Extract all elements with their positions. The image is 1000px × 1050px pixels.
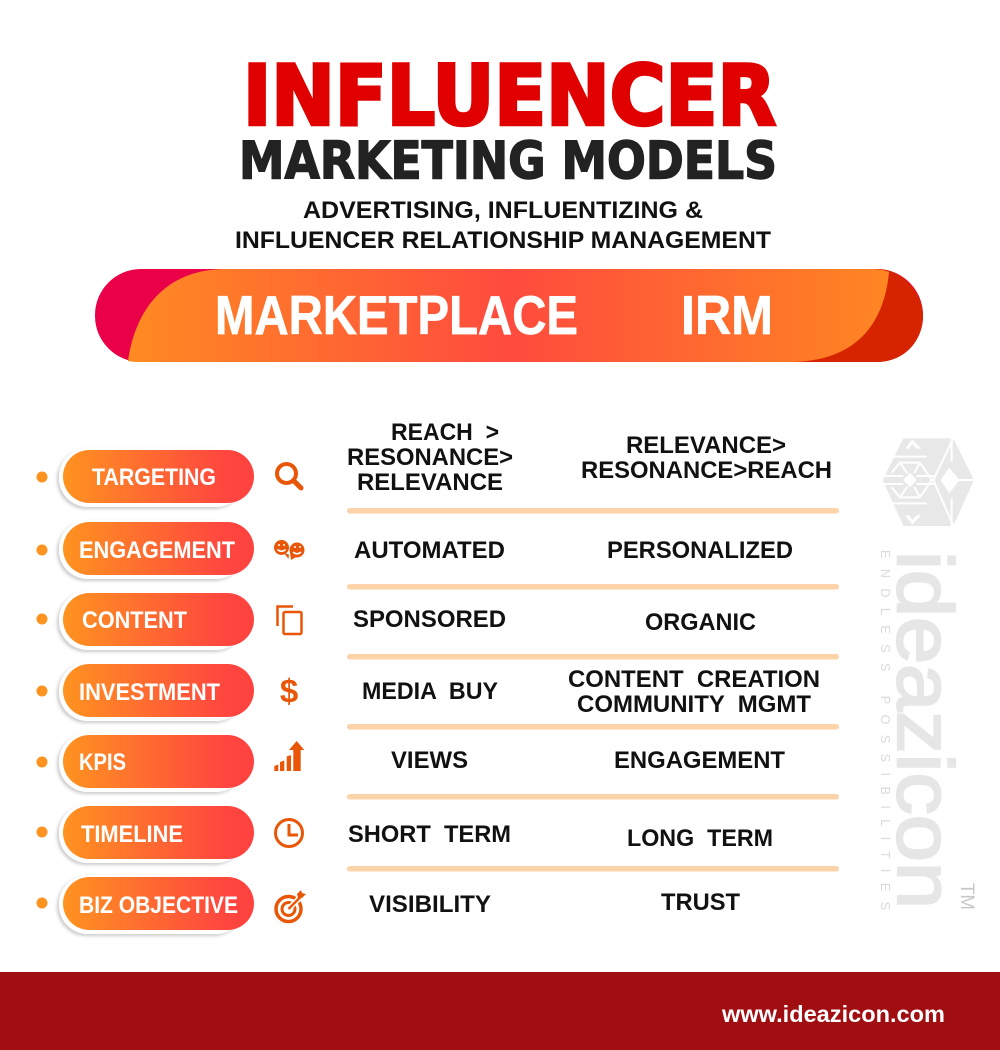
row: investment bbox=[36, 662, 820, 721]
comparison text: RELEVANCE> bbox=[626, 432, 786, 459]
comparison text: MEDIA BUY bbox=[362, 678, 498, 705]
title bbox=[239, 48, 777, 192]
comparison text: REACH > bbox=[391, 419, 499, 446]
icon: copy bbox=[278, 606, 302, 634]
pill label bbox=[59, 662, 254, 721]
row: targeting bbox=[36, 419, 832, 507]
comparison text: PERSONALIZED bbox=[607, 537, 793, 564]
pill label bbox=[59, 875, 254, 934]
pill label: TARGETING bbox=[92, 464, 216, 491]
title: INFLUENCER bbox=[243, 48, 776, 144]
comparison text bbox=[362, 666, 820, 718]
comparison text: LONG TERM bbox=[627, 825, 773, 852]
logo mark bbox=[883, 438, 974, 526]
pill label bbox=[59, 804, 254, 863]
pill label: CONTENT bbox=[82, 607, 187, 634]
trademark: TM bbox=[956, 883, 977, 910]
footer band bbox=[0, 972, 1000, 1050]
comparison text bbox=[369, 889, 740, 918]
row: timeline bbox=[36, 804, 773, 863]
header bar: marketplace vs IRM: IRM bbox=[681, 284, 773, 346]
comparison text bbox=[391, 747, 785, 774]
pill label bbox=[59, 591, 254, 650]
icon: clock bbox=[276, 820, 302, 846]
comparison text: RELEVANCE bbox=[357, 469, 503, 496]
comparison text bbox=[353, 606, 756, 636]
comparison text: CONTENT CREATION bbox=[568, 666, 820, 693]
icon: growth bars bbox=[274, 741, 304, 771]
pill label: BIZ OBJECTIVE bbox=[79, 892, 238, 919]
tagline: ENDLESS POSSIBILITIES bbox=[878, 550, 892, 910]
subtitle: ADVERTISING, INFLUENTIZING & bbox=[303, 197, 703, 224]
comparison text: ORGANIC bbox=[645, 609, 756, 636]
comparison text: VISIBILITY bbox=[369, 891, 491, 918]
bullet bbox=[36, 756, 48, 768]
watermark: ideazicon logo bbox=[878, 438, 977, 910]
row: content bbox=[36, 591, 756, 650]
bullet bbox=[36, 826, 48, 838]
subtitle: INFLUENCER RELATIONSHIP MANAGEMENT bbox=[235, 227, 771, 254]
bullet bbox=[36, 544, 48, 556]
comparison text: RESONANCE>REACH bbox=[581, 457, 832, 484]
comparison text: VIEWS bbox=[391, 747, 468, 774]
comparison text: SHORT TERM bbox=[348, 821, 511, 848]
bullet bbox=[36, 614, 48, 624]
pill label bbox=[59, 733, 254, 792]
comparison text: RESONANCE> bbox=[347, 444, 513, 471]
pill label bbox=[59, 520, 254, 579]
pill label: TIMELINE bbox=[81, 821, 183, 848]
comparison text: SPONSORED bbox=[353, 606, 506, 633]
icon: target bbox=[276, 890, 306, 922]
row: KPIs bbox=[36, 733, 785, 792]
comparison text: COMMUNITY MGMT bbox=[577, 691, 811, 718]
comparison text: TRUST bbox=[661, 889, 740, 916]
icon: magnifier bbox=[277, 464, 301, 488]
comparison text bbox=[354, 537, 793, 564]
bullet bbox=[36, 472, 48, 482]
title: MARKETING MODELS bbox=[239, 132, 777, 192]
row: biz objective bbox=[36, 875, 740, 934]
header bar: marketplace vs IRM: MARKETPLACE bbox=[215, 284, 578, 346]
pill label bbox=[59, 448, 254, 507]
icon: chat faces bbox=[274, 540, 304, 560]
pill label: ENGAGEMENT bbox=[79, 537, 235, 564]
pill label: INVESTMENT bbox=[79, 679, 220, 706]
bullet bbox=[36, 686, 48, 696]
icon: dollar: $ bbox=[280, 672, 298, 710]
wordmark: ideazicon bbox=[881, 551, 970, 909]
bullet bbox=[36, 898, 48, 908]
subtitle bbox=[235, 197, 771, 254]
header bar: marketplace vs IRM bbox=[95, 269, 923, 362]
comparison text bbox=[347, 419, 832, 496]
comparison text bbox=[348, 821, 773, 852]
pill label: KPIS bbox=[79, 749, 126, 776]
comparison text: AUTOMATED bbox=[354, 537, 505, 564]
footer band: www.ideazicon.com bbox=[721, 1001, 945, 1027]
row: engagement bbox=[36, 520, 793, 579]
comparison text: ENGAGEMENT bbox=[614, 747, 785, 774]
